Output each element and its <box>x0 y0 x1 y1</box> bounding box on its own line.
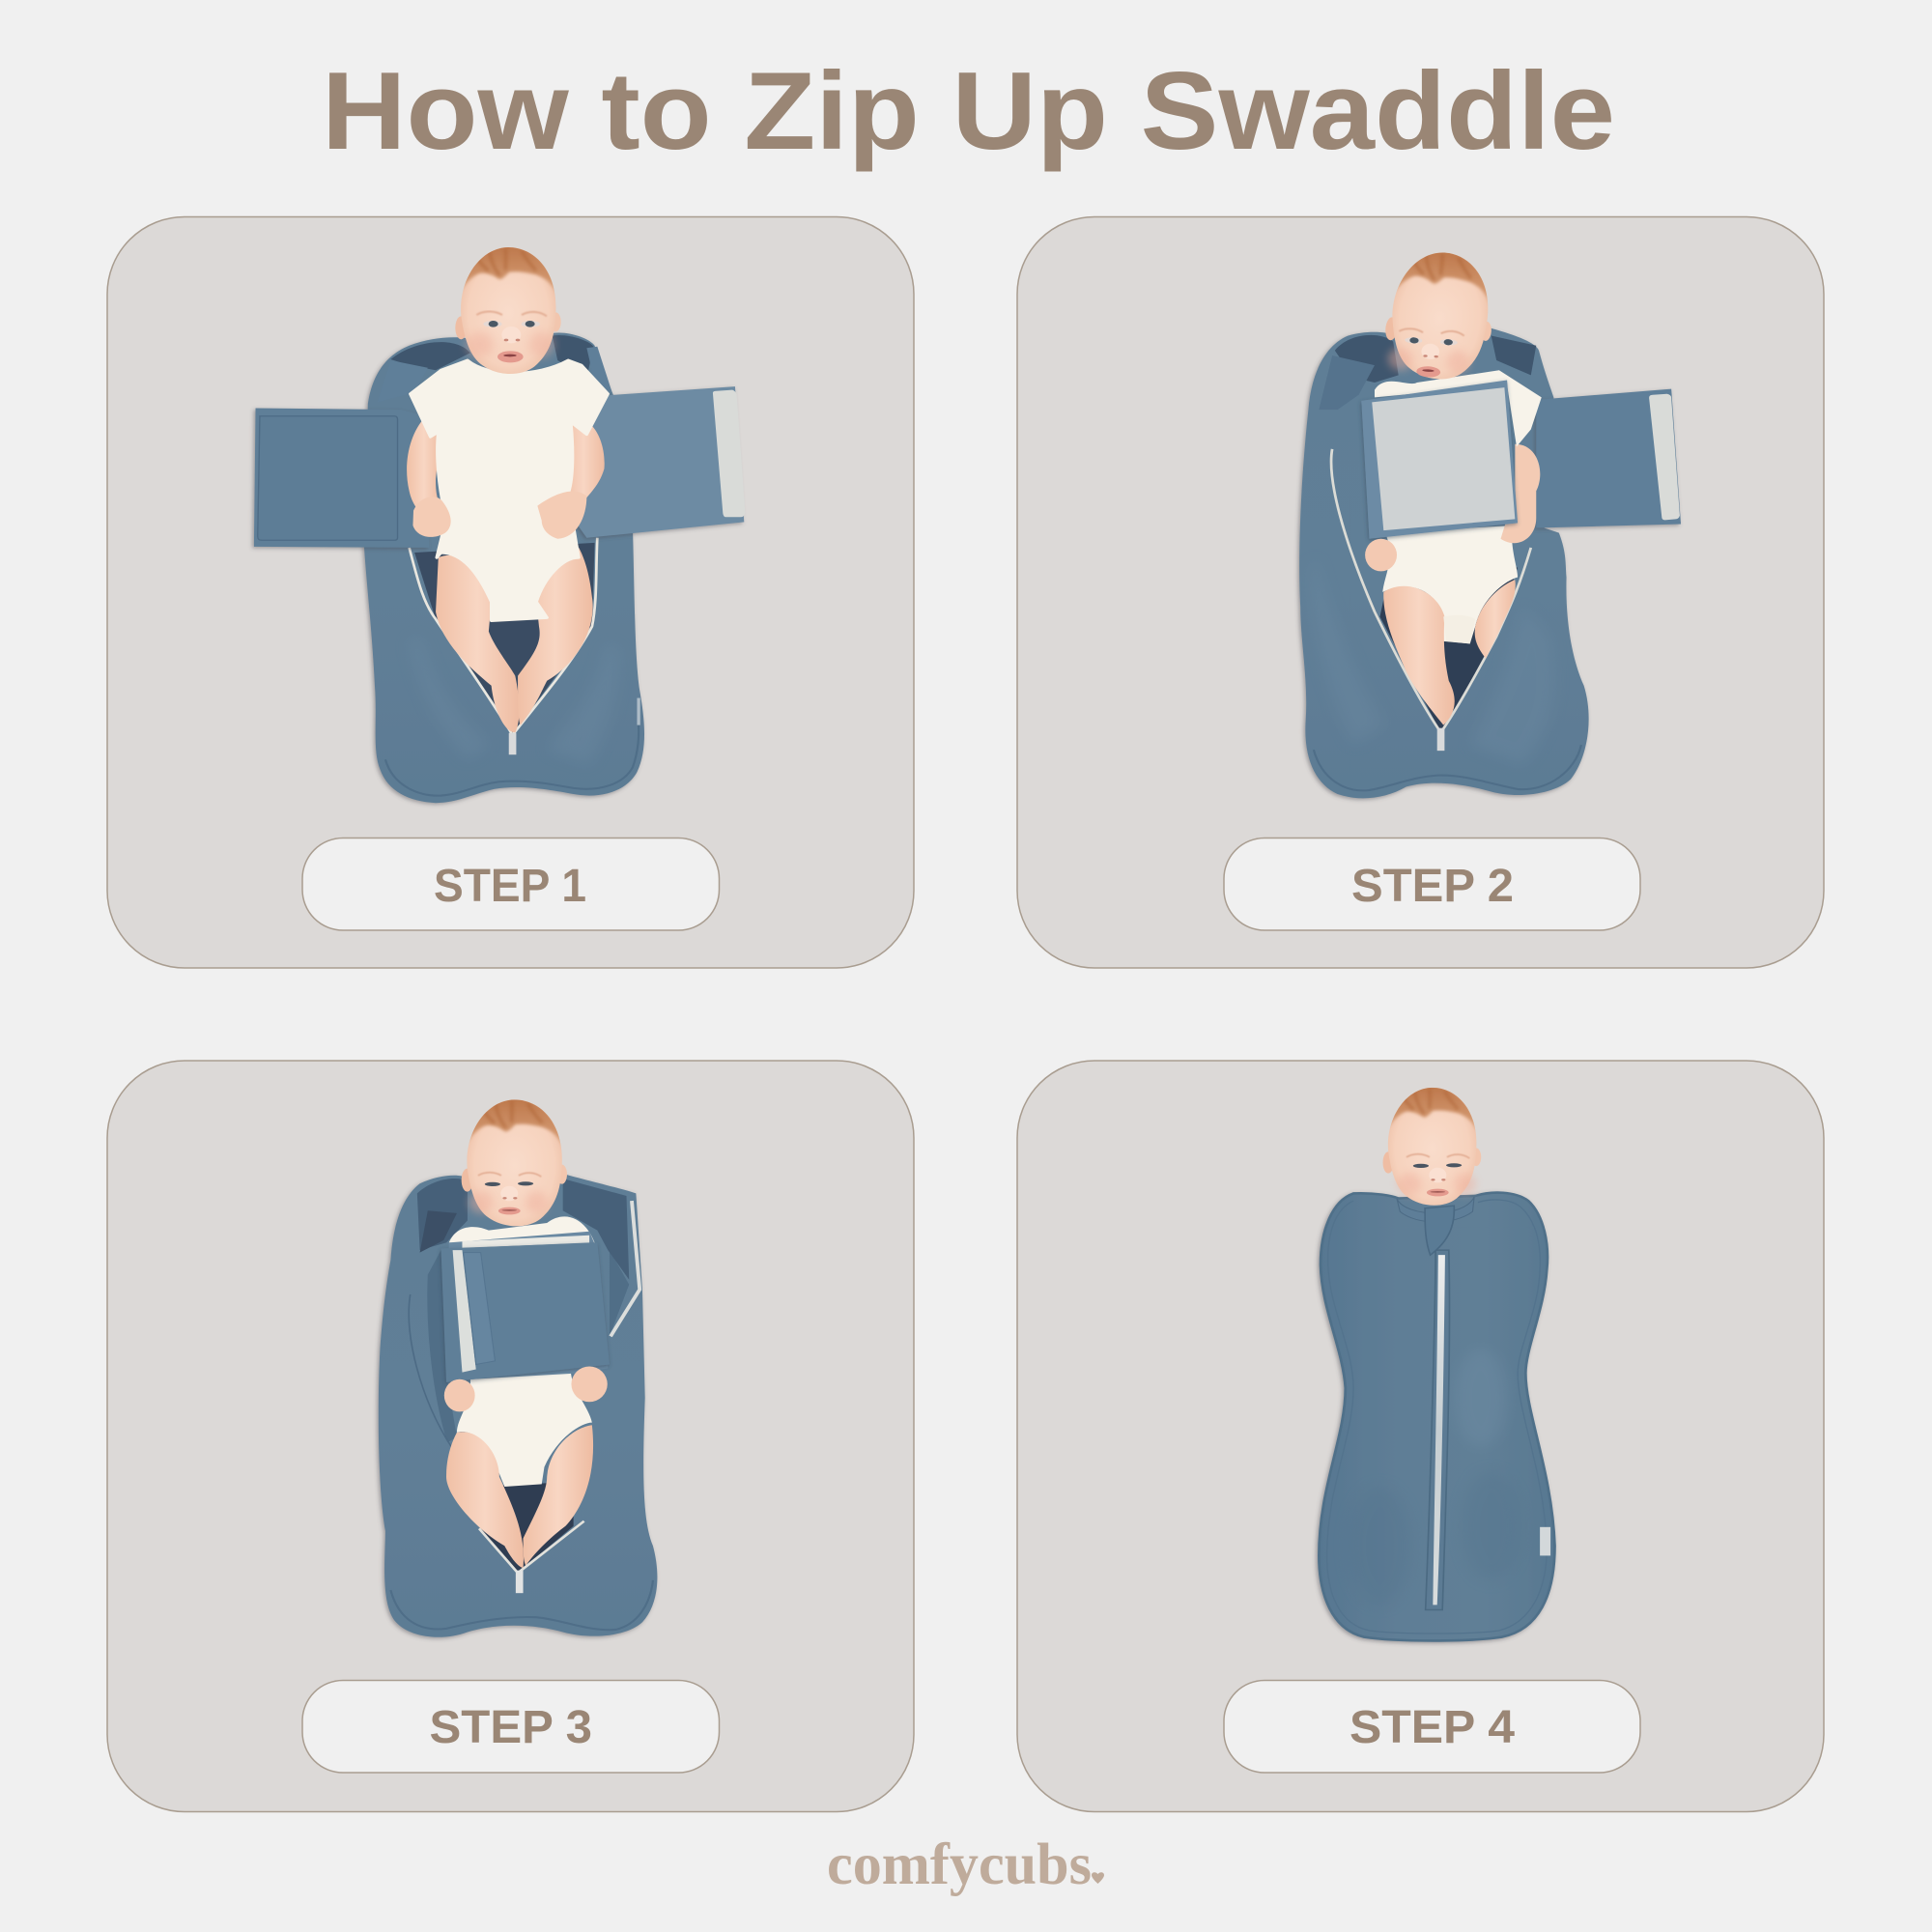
step 2 panel background <box>1017 216 1824 968</box>
velcro strip <box>1649 394 1680 520</box>
arms <box>407 417 441 513</box>
left zipper tape <box>409 1294 451 1447</box>
garment label <box>637 698 640 725</box>
neck tab <box>1425 1206 1454 1255</box>
velcro strip <box>713 390 745 517</box>
top wrap layer <box>441 1242 610 1382</box>
photo: baby zipped up in swaddle <box>1319 1085 1554 1640</box>
white strip left <box>453 1250 476 1373</box>
hood interior <box>417 1179 629 1280</box>
hood interior <box>390 335 593 378</box>
step 4 panel background <box>1017 1061 1824 1812</box>
baby head, step 4 <box>1383 1085 1481 1206</box>
onesie lower <box>457 1371 592 1487</box>
hands <box>412 497 451 537</box>
zipped swaddle body <box>1319 1193 1554 1640</box>
baby head, step 2 <box>1381 245 1498 384</box>
step 2 label: STEP 2 <box>1351 861 1514 912</box>
open swaddle body <box>379 1174 657 1637</box>
collar <box>1397 1197 1474 1222</box>
velcro loop panel <box>1372 387 1515 530</box>
step 4 label: STEP 4 <box>1350 1702 1515 1753</box>
zipper pull <box>509 733 516 754</box>
swaddle and baby body, step 1 <box>254 332 745 803</box>
fabric folds <box>410 637 619 764</box>
legs <box>436 555 519 732</box>
fabric folds <box>1311 557 1554 764</box>
step 3 label: STEP 3 <box>429 1702 592 1753</box>
right arm <box>1501 444 1540 543</box>
onesie lower <box>1382 526 1518 643</box>
zipper lower tapes <box>479 1521 584 1573</box>
hood interior <box>1335 335 1536 383</box>
panel: step 2 <box>1017 216 1824 968</box>
left wing <box>254 409 429 548</box>
onesie upper <box>1375 370 1542 446</box>
logo: comfycubs <box>827 1833 1104 1897</box>
right wing <box>574 386 744 538</box>
diaper <box>1443 615 1475 643</box>
baby head, step 3 <box>462 1097 567 1226</box>
white strip top <box>462 1236 589 1248</box>
panel: step 1 <box>107 216 914 968</box>
zipper pull <box>516 1571 524 1593</box>
collar and neck tab <box>1397 1197 1474 1255</box>
step 2 pill <box>1224 838 1640 930</box>
step 1 pill <box>302 838 719 930</box>
step 1 panel background <box>107 216 914 968</box>
left wing stitched panel <box>258 416 398 540</box>
photo: both wings folded over chest <box>379 1097 657 1637</box>
zipper placket <box>1426 1250 1450 1610</box>
legs <box>446 1432 524 1568</box>
hood collar <box>378 347 611 402</box>
open zipper interior <box>1379 567 1518 732</box>
step 3 panel background <box>107 1061 914 1812</box>
open zipper interior <box>414 543 595 735</box>
title: How to Zip Up Swaddle <box>322 50 1615 173</box>
fabric shading <box>1349 1349 1520 1605</box>
velcro pocket <box>464 1253 495 1364</box>
onesie <box>411 360 608 620</box>
under layer of wrap <box>446 1232 608 1380</box>
hood tab <box>420 1210 457 1253</box>
onesie neck <box>449 1216 595 1242</box>
swaddle and baby body, step 2 <box>1299 328 1681 798</box>
panel: step 3 <box>107 1061 914 1812</box>
swaddle and baby body, step 3 <box>379 1174 657 1637</box>
zipper tape <box>1433 1255 1445 1605</box>
step 3 pill <box>302 1681 719 1773</box>
panel: step 4 <box>1017 1061 1824 1812</box>
right zipper tape <box>611 1201 639 1336</box>
edge stitching <box>1327 1200 1547 1634</box>
baby head, step 1 <box>455 244 561 374</box>
garment label <box>1540 1527 1550 1555</box>
icon: logo heart <box>1092 1872 1104 1884</box>
photo: first wing folded over chest <box>1299 245 1681 798</box>
open swaddle body <box>1299 328 1589 798</box>
open zipper interior <box>478 1482 574 1573</box>
right wing <box>1536 389 1681 528</box>
legs <box>1383 586 1455 725</box>
hood tab <box>1319 355 1375 410</box>
step 4 pill <box>1224 1681 1640 1773</box>
folded wing pad <box>1361 380 1518 539</box>
step 1 label: STEP 1 <box>434 861 586 912</box>
hands <box>444 1379 475 1411</box>
open swaddle body <box>364 332 644 803</box>
left hand <box>1365 539 1397 571</box>
swaddle silhouette <box>1319 1193 1554 1640</box>
logo wordmark: comfycubs <box>827 1833 1092 1897</box>
fold shadows beside the wrap <box>427 1250 629 1442</box>
photo: baby on open swaddle with wings out <box>254 244 745 803</box>
zipper tapes <box>410 538 597 735</box>
zipper pull <box>1437 728 1444 751</box>
zipper tapes <box>1331 449 1531 732</box>
